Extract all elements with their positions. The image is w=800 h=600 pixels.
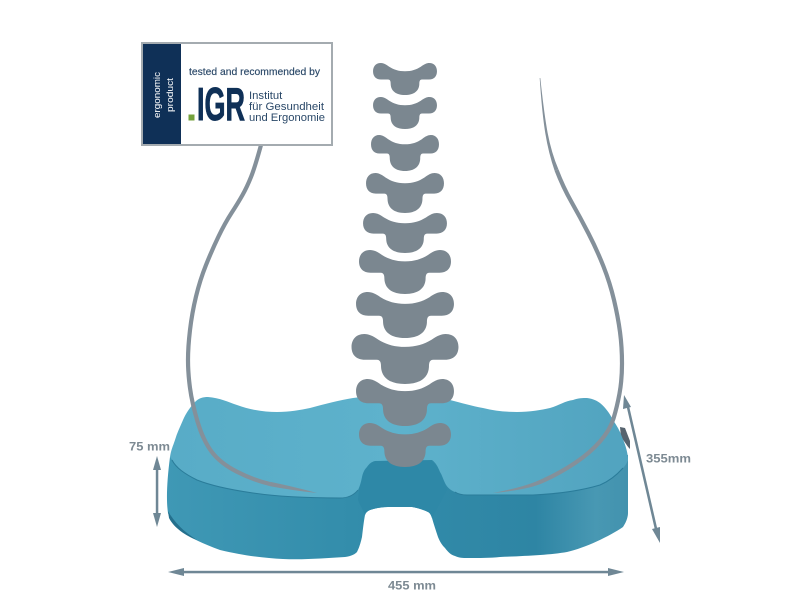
logo: IGR: IGR	[197, 78, 245, 130]
text: tested and recommended by: tested and recommended by	[189, 67, 321, 78]
vertebra 5	[363, 213, 447, 253]
label: product: product	[165, 78, 176, 112]
vertebra 10	[359, 423, 451, 467]
left body contour	[188, 145, 317, 493]
carry strap	[620, 427, 630, 449]
label: ergonomic: ergonomic	[152, 72, 163, 118]
label: 455 mm: 455 mm	[388, 580, 436, 592]
vertebra 8	[352, 334, 458, 384]
text: institute name: für Gesundheit	[249, 101, 325, 113]
text: institute name: Institut	[249, 90, 283, 102]
label: 355mm: 355mm	[646, 454, 691, 466]
logo dot	[188, 114, 194, 120]
vertebra 1	[373, 63, 437, 95]
label: 75 mm: 75 mm	[129, 442, 170, 454]
cushion top surface	[170, 395, 628, 498]
vertebra 6	[359, 250, 451, 294]
panel: ergonomic product	[143, 44, 181, 144]
vertebra 4	[366, 173, 444, 213]
vertebra 7	[356, 292, 454, 338]
arrow: depth 355mm	[623, 395, 660, 543]
text: institute name: und Ergonomie	[249, 112, 325, 124]
arrow: width 455 mm	[168, 568, 624, 576]
arrow: height 75 mm	[153, 456, 161, 527]
right body contour	[493, 78, 622, 493]
badge frame	[142, 43, 332, 145]
bottom-left seam	[168, 511, 197, 540]
seam on top edge	[172, 460, 623, 498]
cushion	[167, 395, 630, 559]
vertebra 2	[373, 97, 437, 129]
text: institute name	[249, 90, 325, 124]
cushion side body	[167, 430, 628, 559]
vertebra 3	[371, 135, 439, 171]
spine vertebrae	[352, 63, 458, 467]
badge: tested and recommended	[142, 43, 332, 145]
notch back wall	[358, 459, 447, 518]
vertebra 9	[356, 379, 454, 426]
